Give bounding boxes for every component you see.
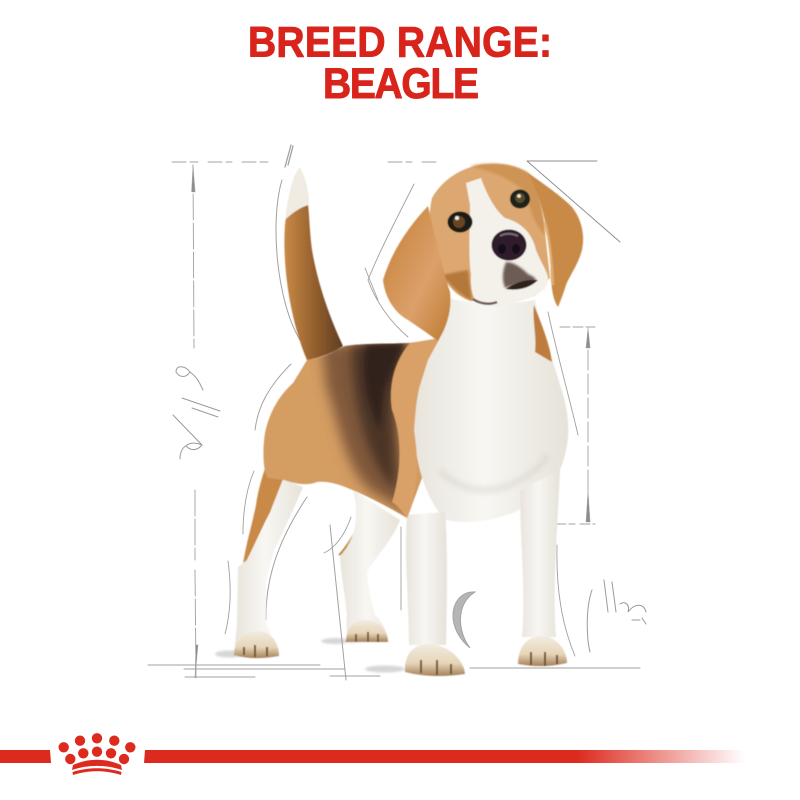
chest and front legs — [391, 298, 568, 676]
nose — [492, 230, 526, 260]
shadows under paws — [215, 638, 405, 672]
logo: Royal Canin crown — [58, 733, 136, 775]
footer rule right — [144, 750, 745, 763]
eye left — [448, 212, 472, 232]
tan shoulder band — [391, 338, 440, 518]
white chest — [414, 298, 568, 522]
mouth — [506, 280, 538, 290]
head tan base — [430, 164, 550, 301]
chest fur shading — [440, 455, 548, 490]
sketch: signature left — [173, 367, 220, 459]
near hind leg — [234, 465, 303, 658]
eye right — [510, 190, 530, 208]
left front leg — [406, 512, 447, 645]
title — [248, 18, 552, 107]
far hind leg — [338, 490, 400, 644]
title: BEAGLE — [323, 59, 479, 107]
sketch: signature right — [587, 580, 646, 652]
ear left — [383, 206, 450, 341]
title: BREED RANGE: — [248, 18, 552, 66]
muzzle dark patch — [503, 262, 536, 288]
illustration: beagle — [234, 163, 583, 676]
right front leg — [520, 470, 560, 637]
white blaze — [466, 178, 548, 305]
footer rule left — [0, 750, 51, 763]
tail — [284, 168, 343, 360]
sketch: measurement lines — [148, 145, 640, 680]
head — [383, 163, 583, 341]
body: tan and saddle — [262, 342, 423, 518]
ear right — [527, 172, 583, 307]
